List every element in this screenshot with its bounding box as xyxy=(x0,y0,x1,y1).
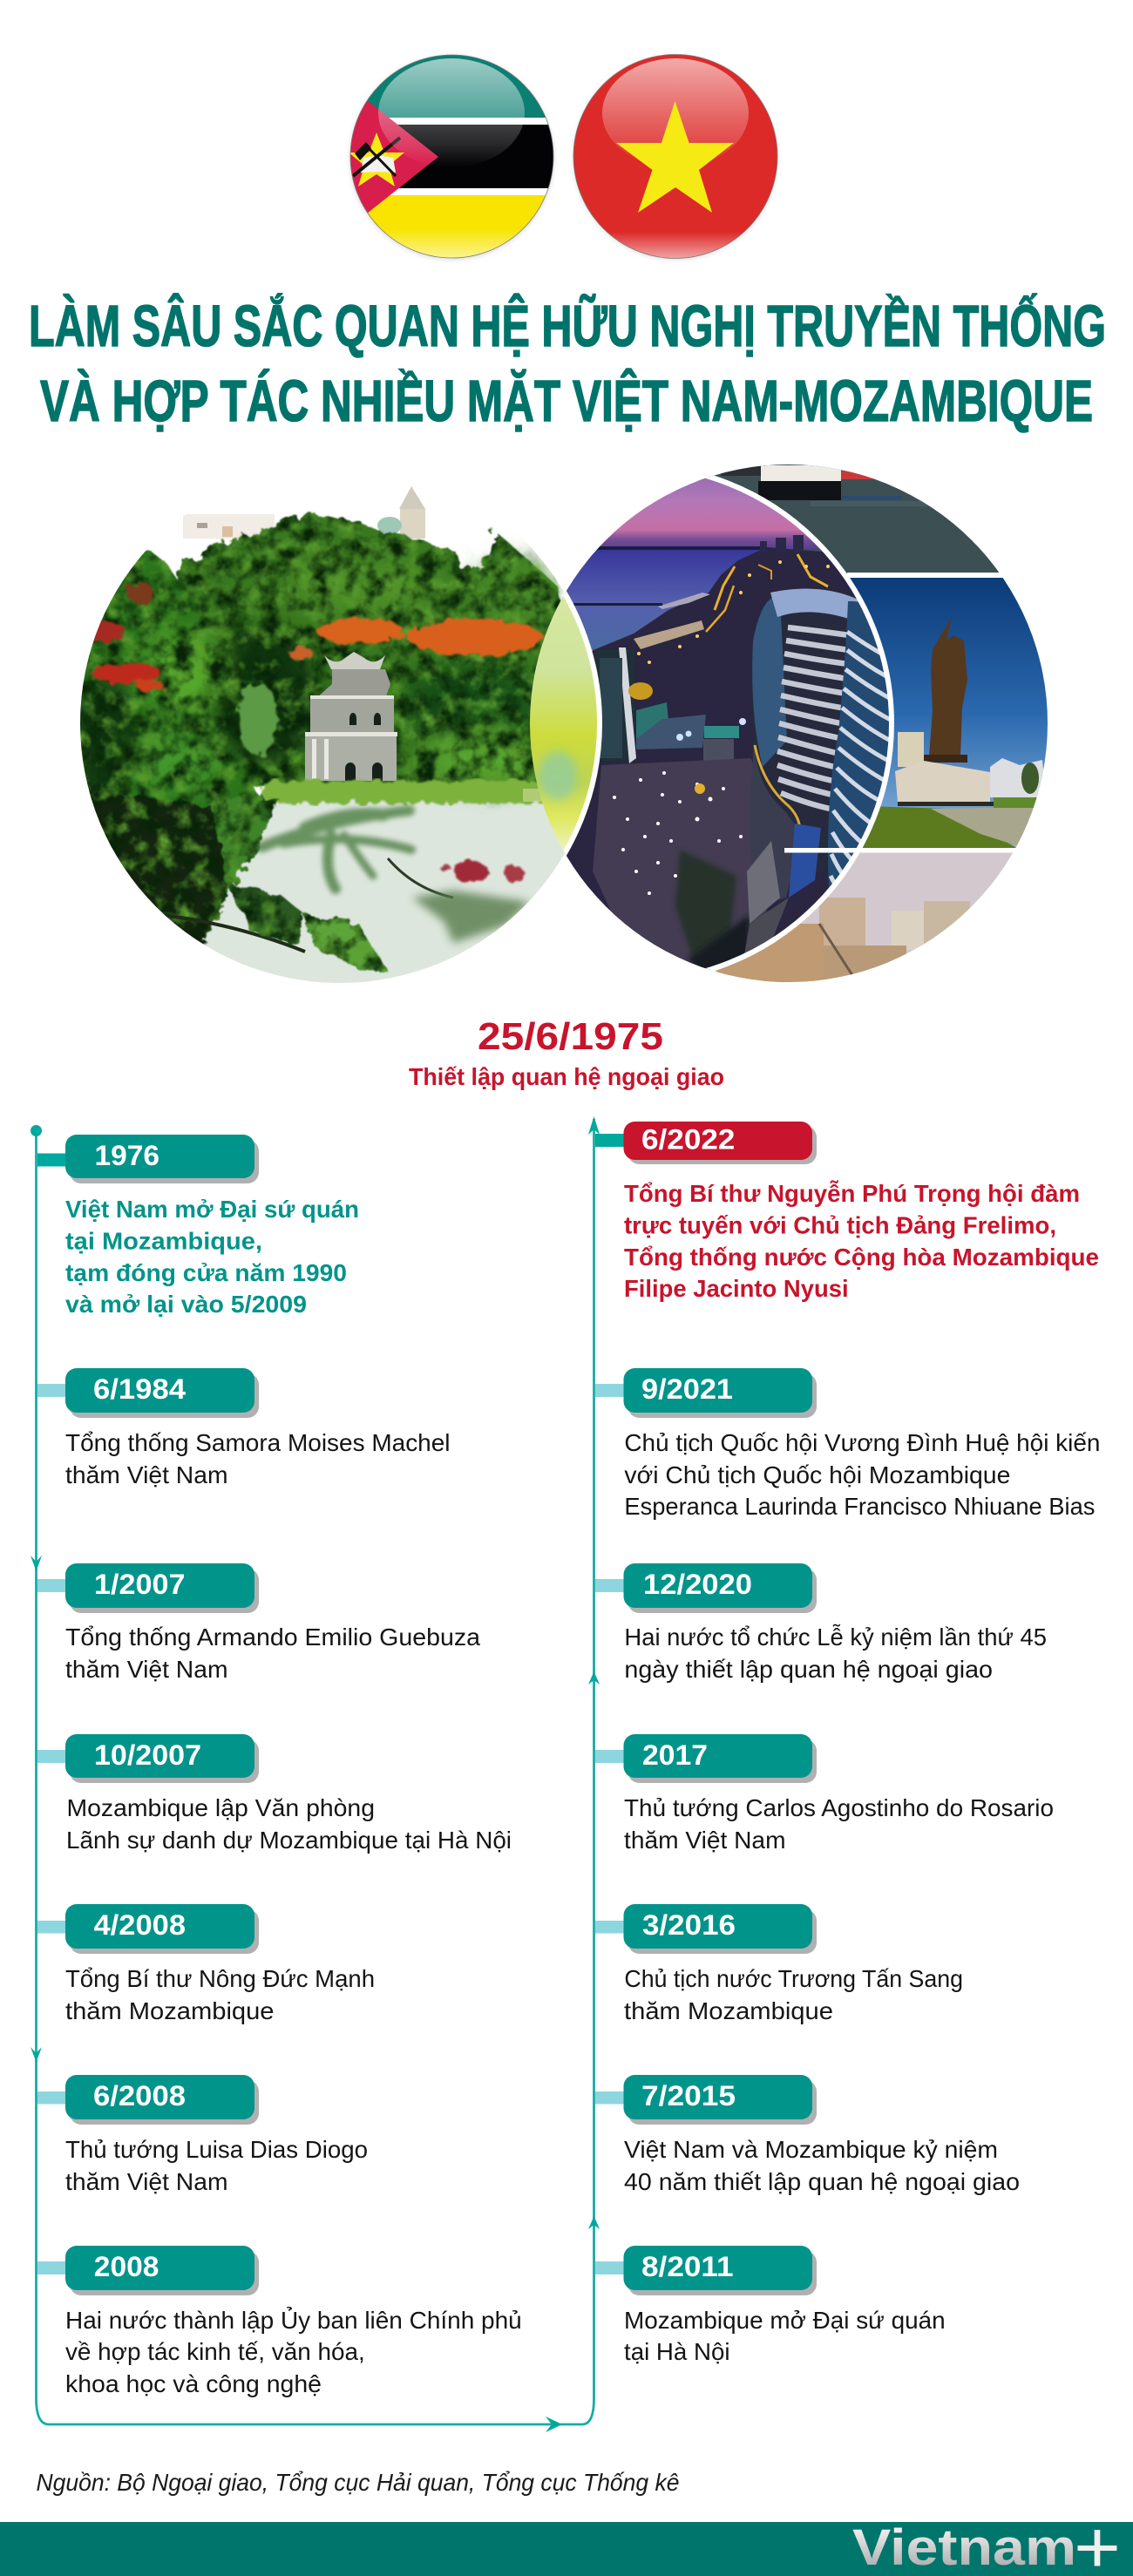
willow xyxy=(239,682,277,756)
logo: Vietnam+ xyxy=(852,2506,1121,2576)
red flowers on water xyxy=(439,860,524,883)
timeline item 12/2020: Hai nước tổ chức Lễ kỷ niệm lần thứ 45 xyxy=(624,1624,1047,1651)
arrow up 2 xyxy=(588,1671,600,1685)
timeline item 3/2016 xyxy=(595,1904,963,2024)
timeline item 4/2008: 4/2008 xyxy=(94,1909,186,1941)
timeline connector path with arrows xyxy=(31,1116,600,2432)
timeline item 4/2008: Tổng Bí thư Nông Đức Mạnh xyxy=(65,1965,375,1992)
timeline item 1976: tạm đóng cửa năm 1990 xyxy=(65,1259,347,1286)
timeline item 2008: về hợp tác kinh tế, văn hóa, xyxy=(65,2338,365,2365)
timeline item 7/2015: 7/2015 xyxy=(641,2080,736,2112)
timeline item 6/2008: thăm Việt Nam xyxy=(65,2168,228,2195)
photo: harbor xyxy=(697,464,999,573)
lower foliage and branch xyxy=(161,915,305,952)
arrow down 2 xyxy=(31,2047,42,2062)
timeline item 4/2008 xyxy=(37,1904,375,2024)
timeline item 1/2007: thăm Việt Nam xyxy=(65,1656,228,1683)
faint skyline xyxy=(183,486,425,539)
source note: Nguồn: Bộ Ngoại giao, Tổng cục Hải quan, Tổng cục Thống kê xyxy=(37,2469,680,2496)
tower main xyxy=(752,589,858,876)
timeline item 6/2022 xyxy=(595,1122,1099,1302)
tower xyxy=(305,652,397,781)
timeline item 2008: khoa học và công nghệ xyxy=(65,2370,322,2397)
arrow up 3 xyxy=(588,1116,600,1135)
foliage mass xyxy=(70,511,571,858)
skyline xyxy=(760,541,767,551)
icon: Mozambique flag xyxy=(342,52,558,261)
date heading xyxy=(409,1015,724,1090)
road lights xyxy=(715,566,735,610)
lights xyxy=(613,560,830,895)
timeline item 10/2007: Lãnh sự danh dự Mozambique tại Hà Nội xyxy=(66,1827,512,1854)
timeline item 8/2011: tại Hà Nội xyxy=(624,2338,730,2365)
timeline item 3/2016: thăm Mozambique xyxy=(624,1997,833,2024)
timeline item 9/2021: với Chủ tịch Quốc hội Mozambique xyxy=(624,1461,1010,1488)
footer band xyxy=(0,2506,1133,2576)
timeline item 1976 xyxy=(37,1135,359,1318)
photo: city skyline xyxy=(711,852,1013,982)
timeline item 9/2021: Chủ tịch Quốc hội Vương Đình Huệ hội kiến xyxy=(624,1429,1100,1456)
timeline item 6/2022: trực tuyến với Chủ tịch Đảng Frelimo, xyxy=(624,1211,1056,1239)
arrow right xyxy=(546,2417,562,2432)
low buildings xyxy=(636,702,669,741)
timeline item 9/2021: 9/2021 xyxy=(641,1373,733,1405)
white arc separating center photo xyxy=(706,476,894,971)
timeline item 9/2021: Esperanca Laurinda Francisco Nhiuane Bias xyxy=(624,1493,1095,1520)
timeline item 12/2020: ngày thiết lập quan hệ ngoại giao xyxy=(624,1656,993,1683)
coast land xyxy=(565,547,858,970)
timeline item 3/2016: 3/2016 xyxy=(642,1909,736,1941)
timeline item 6/2022: Filipe Jacinto Nyusi xyxy=(624,1275,849,1302)
timeline item 1/2007: 1/2007 xyxy=(94,1569,185,1600)
timeline item 10/2007: 10/2007 xyxy=(94,1739,201,1771)
plaza xyxy=(593,758,767,970)
dark lower-left foliage xyxy=(74,789,279,959)
timeline item 9/2021 xyxy=(595,1368,1100,1520)
timeline item 1976: Việt Nam mở Đại sứ quán xyxy=(65,1196,359,1223)
timeline item 8/2011: 8/2011 xyxy=(641,2251,734,2282)
timeline item 12/2020: 12/2020 xyxy=(643,1569,752,1600)
timeline item 10/2007: Mozambique lập Văn phòng xyxy=(66,1794,375,1821)
timeline item 2008 xyxy=(37,2246,522,2397)
arrow up 1 xyxy=(588,2216,600,2229)
timeline item 7/2015: 40 năm thiết lập quan hệ ngoại giao xyxy=(624,2168,1020,2195)
beach buildings xyxy=(634,620,704,649)
timeline item 3/2016: Chủ tịch nước Trương Tấn Sang xyxy=(624,1965,963,1992)
timeline item 1/2007: Tổng thống Armando Emilio Guebuza xyxy=(65,1624,480,1651)
timeline item 2008: 2008 xyxy=(94,2251,159,2282)
timeline item 6/1984: thăm Việt Nam xyxy=(65,1461,228,1488)
overlap lens xyxy=(523,588,606,858)
white gaps between right photos xyxy=(847,573,1056,577)
grass xyxy=(261,781,549,803)
timeline item 2017: Thủ tướng Carlos Agostinho do Rosario xyxy=(624,1794,1054,1821)
icon: Vietnam flag xyxy=(571,52,780,261)
red blossoms xyxy=(84,582,164,691)
timeline item 6/2022: Tổng Bí thư Nguyễn Phú Trọng hội đàm xyxy=(624,1180,1080,1207)
hanging foliage xyxy=(261,810,411,889)
timeline item 6/2022: 6/2022 xyxy=(641,1124,735,1156)
timeline item 1976: tại Mozambique, xyxy=(65,1227,262,1255)
timeline item 2017: thăm Việt Nam xyxy=(624,1827,786,1854)
timeline item 8/2011 xyxy=(595,2246,946,2365)
timeline item 4/2008: thăm Mozambique xyxy=(65,1997,274,2024)
timeline item 2017 xyxy=(595,1734,1054,1854)
timeline item 12/2020 xyxy=(595,1563,1047,1683)
date heading: Thiết lập quan hệ ngoại giao xyxy=(409,1063,724,1090)
timeline item 6/1984: 6/1984 xyxy=(93,1373,186,1405)
timeline item 6/2022: Tổng thống nước Cộng hòa Mozambique xyxy=(624,1244,1099,1271)
photo: Mozambique collage right parts xyxy=(697,462,1055,989)
timeline item 2017: 2017 xyxy=(642,1739,708,1771)
timeline item 6/2008 xyxy=(37,2075,368,2195)
timeline item 1/2007 xyxy=(37,1563,480,1683)
photo: statue xyxy=(837,578,1055,850)
orange flowers xyxy=(316,618,404,644)
title xyxy=(29,293,1106,434)
timeline item 6/2008: Thủ tướng Luisa Dias Diogo xyxy=(65,2136,368,2163)
white arc of left circle xyxy=(80,464,600,983)
podium xyxy=(750,742,795,901)
timeline item 1976: và mở lại vào 5/2009 xyxy=(65,1291,307,1318)
date heading: 25/6/1975 xyxy=(478,1015,663,1058)
timeline item 7/2015 xyxy=(595,2075,1020,2195)
timeline item 6/2008: 6/2008 xyxy=(93,2080,186,2112)
timeline item 7/2015: Việt Nam và Mozambique kỷ niệm xyxy=(624,2136,998,2163)
timeline item 2008: Hai nước thành lập Ủy ban liên Chính phủ xyxy=(65,2306,522,2334)
photo: Hoan Kiem lake xyxy=(80,486,565,983)
timeline item 10/2007 xyxy=(37,1734,512,1854)
orange disc xyxy=(628,682,653,700)
photo: night city, center xyxy=(565,476,894,971)
tower second xyxy=(828,601,889,888)
arrow down 1 xyxy=(31,1556,42,1571)
water xyxy=(114,798,565,983)
timeline item 6/1984 xyxy=(37,1368,450,1488)
timeline item 1976: 1976 xyxy=(94,1140,159,1171)
logo: Vietnam+: Vietnam xyxy=(852,2519,1076,2576)
timeline item 6/1984: Tổng thống Samora Moises Machel xyxy=(65,1429,450,1456)
timeline item 8/2011: Mozambique mở Đại sứ quán xyxy=(624,2307,946,2334)
